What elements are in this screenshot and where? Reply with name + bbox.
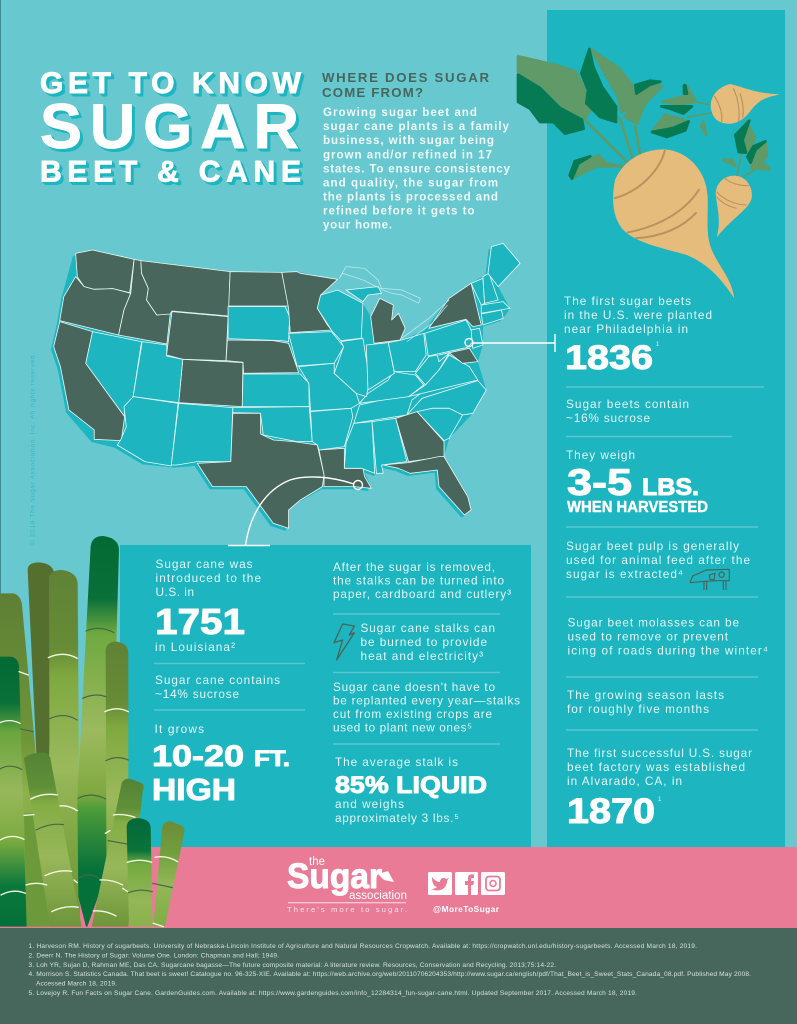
heading: where does sugar come from: COME FROM? (322, 85, 423, 100)
illustration: sugar cane (0, 536, 184, 927)
text block: replanting: Sugar cane doesn't have to (333, 680, 495, 694)
footer band (0, 928, 797, 1024)
text block: beet weight (566, 448, 708, 516)
references: 4. Morrison S. Statistics Canada. That beet is sweet! Catalogue no. 96-325-XIE. Available at: https://web.archive.org/web/20110706204353/http://www.sugar.ca/english/pdf/That_Beet_is_Sweet_Stats_Canada_08.pdf. Published May 2008. (28, 971, 751, 978)
social handle: @MoreToSugar (433, 904, 500, 914)
text block: growing season (567, 688, 724, 716)
intro text block: and quality, the sugar from (323, 176, 498, 189)
title: BEET & CANE (40, 156, 301, 188)
text block: beet pulp: used for animal feed after the (566, 553, 750, 567)
intro text block: your home. (323, 218, 392, 231)
icon: lightning bolt (334, 624, 354, 660)
text block: beet molasses: used to remove or prevent (568, 630, 729, 644)
copyright note: © 2019 The Sugar Association, Inc. All rights reserved. (28, 353, 36, 545)
illustration: sugar beets (518, 49, 780, 298)
text block: first factory 1870: 1 (658, 797, 662, 803)
pink band (0, 847, 797, 928)
text block: cane height (152, 722, 290, 807)
text block: stalk uses (333, 560, 511, 601)
text block: average stalk (335, 755, 487, 825)
references: Accessed March 18, 2019. (36, 980, 117, 988)
title: GET TO KNOW (40, 67, 302, 100)
intro text block: refined before it gets to (323, 204, 474, 217)
text block: cane introduced 1751: introduced to the (156, 571, 261, 585)
intro text block: the plants is processed and (323, 190, 498, 203)
logo: the Sugar association: association (349, 890, 407, 902)
icon: cow (690, 569, 729, 590)
text block: beet molasses (568, 616, 768, 658)
heading: where does sugar come from: WHERE DOES SUGAR (322, 70, 489, 85)
text block: beet pulp (566, 539, 750, 581)
intro text block (323, 106, 511, 231)
text block: replanting: used to plant new ones⁵ (333, 720, 472, 734)
text block: first sugar beets 1836: The first sugar beets (564, 294, 691, 308)
text block: beet pulp: sugar is extracted⁴ (566, 567, 683, 581)
icon: instagram (481, 872, 505, 895)
text block: stalk uses: paper, cardboard and cutlery³ (333, 587, 511, 601)
text block: replanting: cut from existing crops are (333, 707, 492, 721)
text block: beet weight: LBS. (642, 474, 699, 501)
text block: burned for energy: Sugar cane stalks can (360, 621, 495, 635)
text block: first sugar beets 1836: 1 (656, 342, 660, 348)
text block: cane introduced 1751: U.S. in (156, 585, 194, 599)
text block: growing season: for roughly five months (567, 702, 709, 716)
text block: cane introduced 1751: in Louisiana² (155, 640, 235, 654)
text block: cane height: HIGH (152, 772, 236, 807)
text block: first sugar beets 1836: in the U.S. were planted (564, 308, 712, 322)
text block: cane height: FT. (254, 746, 290, 771)
text block: first sugar beets 1836: 1836 (565, 339, 653, 377)
text block: first factory 1870 (567, 746, 752, 831)
text block: first sugar beets 1836: near Philadelphia in (564, 322, 688, 336)
text block: first sugar beets 1836 (564, 294, 712, 377)
icon: twitter (428, 872, 452, 895)
connector: Philadelphia callout (465, 334, 555, 352)
intro text block: sugar cane plants is a family (323, 120, 510, 133)
references: 3. Loh YR, Sujan D, Rahman ME, Das CA. Sugarcane bagasse—The future composite material: A literature review. Resources, Conservation and Recycling. 2013;75:14-22. (28, 962, 556, 969)
intro text block: grown and/or refined in 17 (323, 148, 492, 161)
logo: the Sugar association (287, 856, 407, 914)
text block: cane sucrose: ~14% sucrose (155, 687, 239, 701)
text block: beet sucrose (566, 397, 689, 425)
text block: cane sucrose: Sugar cane contains (155, 673, 280, 687)
text block: cane introduced 1751: Sugar cane was (156, 557, 253, 571)
text block: first factory 1870: beet factory was established (567, 760, 745, 774)
heading: where does sugar come from (322, 70, 489, 100)
text block: replanting (333, 680, 520, 734)
text block: first factory 1870: 1870 (567, 792, 655, 831)
logo: the Sugar association: There's more to sugar. (287, 905, 407, 914)
text block: cane introduced 1751: 1751 (155, 601, 245, 642)
text block: beet weight: 3-5 (567, 462, 632, 503)
text block: average stalk: 85% LIQUID (335, 772, 487, 799)
connector: Louisiana callout (228, 477, 362, 546)
logo: the Sugar association: Sugar (287, 857, 382, 896)
text block: first factory 1870: The first successful U.S. sugar (567, 746, 752, 760)
title (40, 67, 302, 188)
intro text block: business, with sugar being (323, 134, 494, 147)
text block: growing season: The growing season lasts (567, 688, 724, 702)
text block: replanting: be replanted every year—stalks (333, 694, 520, 708)
text block: stalk uses: After the sugar is removed, (333, 560, 495, 574)
text block: cane height: It grows (154, 722, 204, 736)
intro text block: Growing sugar beet and (323, 106, 477, 119)
text block: average stalk: The average stalk is (335, 755, 458, 769)
icon: facebook (455, 872, 478, 895)
logo: the Sugar association: the (309, 856, 325, 868)
text block: beet sucrose: ~16% sucrose (566, 411, 650, 425)
text block: cane introduced 1751 (155, 557, 261, 654)
intro text block: states. To ensure consistency (323, 162, 511, 175)
references: 1. Harveson RM. History of sugarbeets. University of Nebraska-Lincoln Institute of Agriculture and Natural Resources Cropwatch. Available at: https://cropwatch.unl.edu/history-sugarbeets. Accessed March 18, 2019. (28, 943, 697, 950)
text block: average stalk: and weighs (335, 797, 404, 811)
text block: beet weight: They weigh (566, 448, 635, 462)
text block: average stalk: approximately 3 lbs.⁵ (335, 811, 459, 825)
text block: cane sucrose (155, 673, 280, 701)
text block: beet pulp: Sugar beet pulp is generally (566, 539, 739, 553)
title: SUGAR (40, 92, 299, 162)
text block: beet molasses: icing of roads during the winter⁴ (568, 644, 768, 658)
text block: beet sucrose: Sugar beets contain (566, 397, 689, 411)
text block: cane height: 10-20 (152, 740, 244, 773)
panel: sugar beet column (547, 10, 785, 848)
text block: burned for energy (360, 621, 495, 663)
references (28, 943, 751, 997)
references: 5. Lovejoy R. Fun Facts on Sugar Cane. GardenGuides.com. Available at: https://www.gardenguides.com/info_12284314_fun-sugar-cane.html. Updated September 2017. Accessed March 18, 2019. (28, 990, 637, 997)
references: 2. Deerr N. The History of Sugar: Volume One. London: Chapman and Hall; 1949. (28, 952, 279, 960)
text block: first factory 1870: in Alvarado, CA, in (567, 774, 682, 788)
map of the United States (51, 243, 520, 531)
text block: stalk uses: the stalks can be turned into (333, 574, 504, 588)
panel: sugar cane (120, 545, 531, 848)
text block: beet molasses: Sugar beet molasses can be (568, 616, 739, 630)
text block: burned for energy: heat and electricity³ (360, 649, 483, 663)
text block: burned for energy: be burned to provide (360, 635, 487, 649)
text block: beet weight: WHEN HARVESTED (567, 499, 708, 516)
